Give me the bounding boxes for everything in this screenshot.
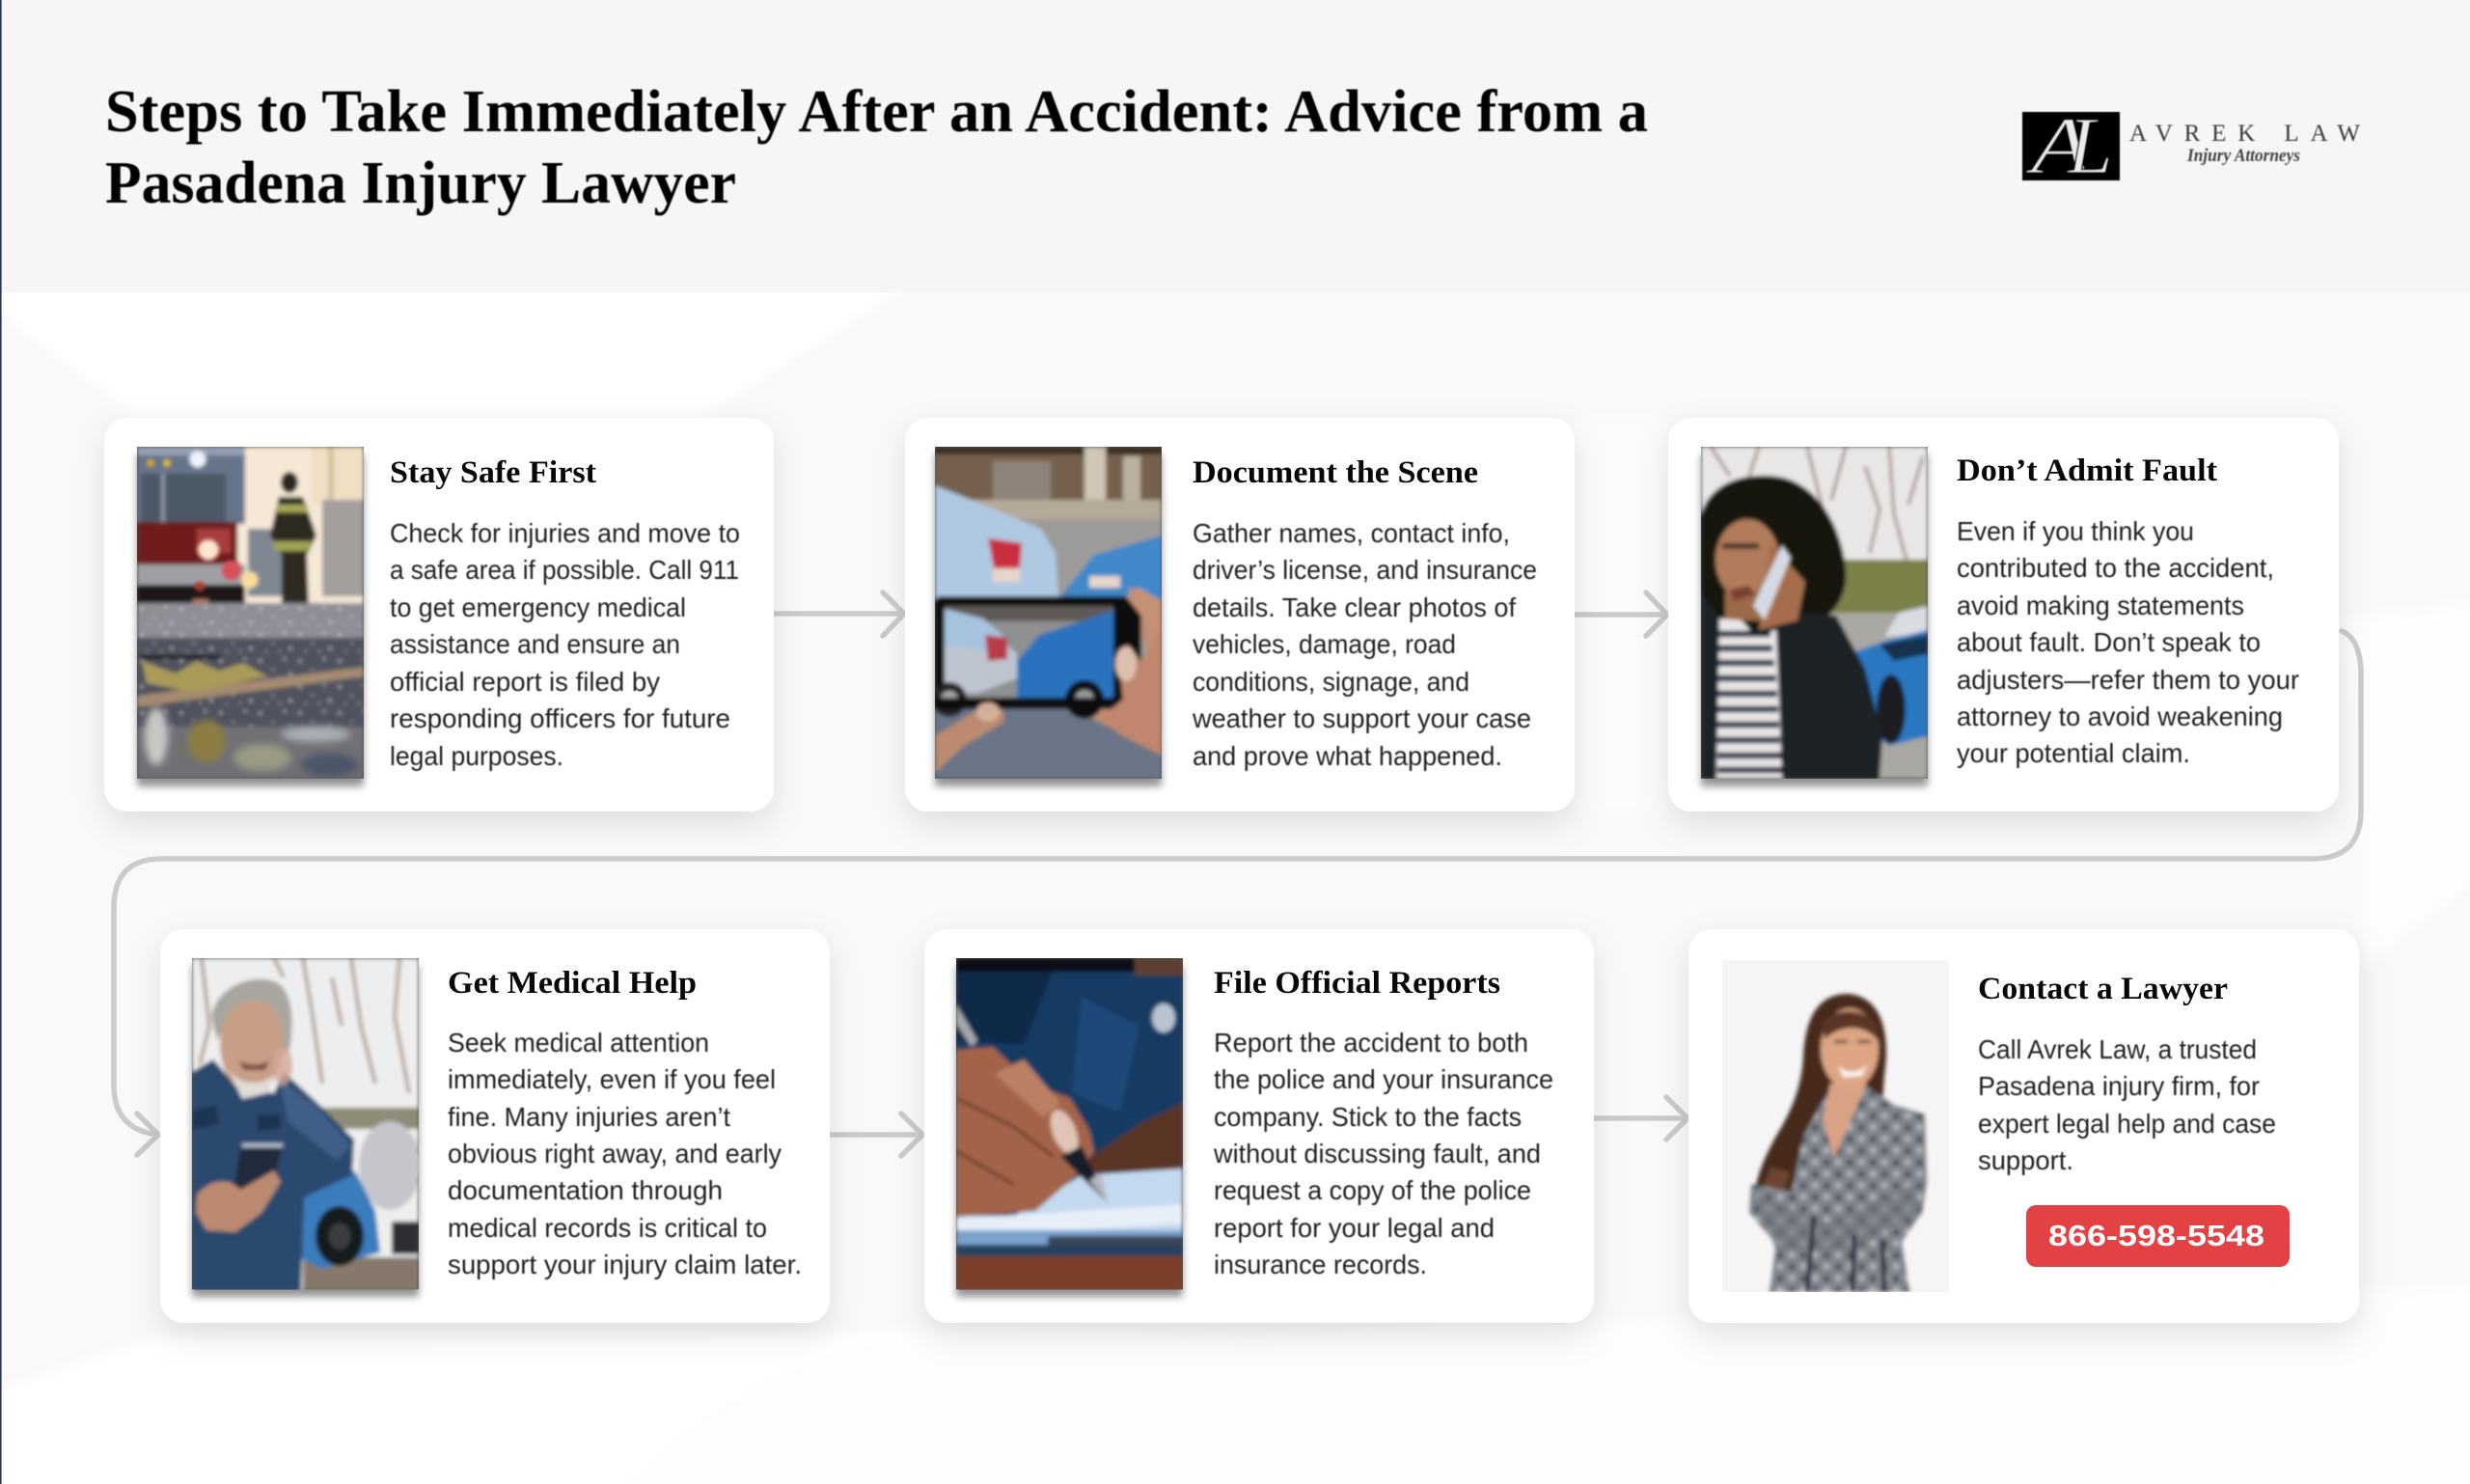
body text: report for your legal and (1214, 1213, 1495, 1243)
photo: worried woman on the phone by a crashed car (1701, 447, 1928, 779)
logo: Avrek Law: L (2067, 101, 2113, 191)
heading: Stay Safe First (390, 455, 596, 490)
body text: and prove what happened. (1193, 741, 1502, 771)
logo: Avrek Law: AVREK LAW (2129, 121, 2360, 147)
body text: Call Avrek Law, a trusted (1978, 1034, 2257, 1064)
body text: adjusters—refer them to your (1957, 665, 2299, 695)
body text: Check for injuries and move to (390, 518, 740, 548)
arrow: step 2 to step 3 (1575, 592, 1667, 636)
body text: legal purposes. (390, 741, 563, 771)
body text (1978, 1034, 2276, 1175)
heading: File Official Reports (1214, 966, 1500, 1001)
body text: attorney to avoid weakening (1957, 701, 2283, 731)
phone button: 866-598-5548 (2048, 1219, 2264, 1252)
body text: immediately, even if you feel (448, 1064, 776, 1094)
logo: Avrek Law: Injury Attorneys (2186, 147, 2300, 166)
body text: Pasadena injury firm, for (1978, 1071, 2260, 1101)
body text: support. (1978, 1145, 2073, 1175)
body text: to get emergency medical (390, 592, 686, 622)
panel: Document the Scene (905, 418, 1575, 811)
body text: official report is filed by (390, 667, 660, 697)
body text: vehicles, damage, road (1193, 629, 1456, 659)
body text: documentation through (448, 1175, 723, 1205)
title: Steps to Take Immediately After an Accident: Advice from a (105, 79, 1648, 145)
phone button (2026, 1205, 2290, 1267)
body text: Even if you think you (1957, 516, 2194, 546)
photo: fire truck and firefighter at crash scene (137, 447, 364, 779)
body text (1957, 516, 2299, 768)
heading: Document the Scene (1193, 455, 1478, 490)
photo: smiling lawyer in patterned blazer (1722, 960, 1949, 1292)
arrow: step 3 to step 4 connector (114, 631, 2361, 1155)
body text: weather to support your case (1192, 703, 1531, 733)
body text: your potential claim. (1957, 738, 2190, 768)
heading: Get Medical Help (448, 966, 697, 1001)
arrow: step 4 to step 5 (830, 1113, 922, 1156)
body text: responding officers for future (390, 703, 730, 733)
panel: Stay Safe First (104, 418, 774, 811)
arrow: step 1 to step 2 (774, 592, 904, 636)
body text: details. Take clear photos of (1193, 592, 1516, 622)
body text: contributed to the accident, (1957, 553, 2274, 583)
body text: without discussing fault, and (1213, 1139, 1541, 1168)
heading: Contact a Lawyer (1978, 972, 2228, 1006)
panel: Don't Admit Fault (1668, 418, 2339, 811)
panel: Contact a Lawyer (1688, 929, 2359, 1323)
body text: Seek medical attention (448, 1028, 709, 1058)
body text (390, 518, 740, 771)
body text: request a copy of the police (1214, 1175, 1531, 1205)
body text: obvious right away, and early (448, 1139, 782, 1168)
panel: File Official Reports (924, 929, 1594, 1323)
photo: hands photographing car crash with a phone (932, 447, 1162, 779)
body text: avoid making statements (1957, 591, 2244, 620)
body text: assistance and ensure an (390, 629, 680, 659)
body text: expert legal help and case (1978, 1109, 2276, 1139)
photo: hand writing on paperwork with a pen (956, 958, 1183, 1290)
body text: fine. Many injuries aren’t (448, 1102, 730, 1132)
body text (1192, 518, 1537, 771)
body text: about fault. Don’t speak to (1957, 627, 2261, 657)
body text: conditions, signage, and (1193, 667, 1469, 697)
arrow: step 5 to step 6 (1594, 1097, 1688, 1140)
body text: driver’s license, and insurance (1193, 555, 1537, 585)
body text (1213, 1028, 1553, 1279)
title (105, 79, 1648, 216)
body text: the police and your insurance (1214, 1064, 1553, 1094)
body text: company. Stick to the facts (1214, 1102, 1522, 1132)
body text: support your injury claim later. (448, 1250, 802, 1279)
logo: Avrek Law: A (2025, 101, 2092, 191)
heading: Don’t Admit Fault (1957, 453, 2217, 488)
title: Pasadena Injury Lawyer (105, 151, 736, 216)
body text: Gather names, contact info, (1193, 518, 1510, 548)
logo: Avrek Law (2022, 101, 2360, 191)
body text: Report the accident to both (1214, 1028, 1528, 1058)
panel: Get Medical Help (160, 929, 830, 1323)
photo: man holding his neck and checking phone by crashed car (192, 958, 421, 1290)
body text: a safe area if possible. Call 911 (390, 555, 739, 585)
body text: medical records is critical to (448, 1213, 767, 1243)
body text: insurance records. (1214, 1250, 1427, 1279)
body text (448, 1028, 802, 1279)
